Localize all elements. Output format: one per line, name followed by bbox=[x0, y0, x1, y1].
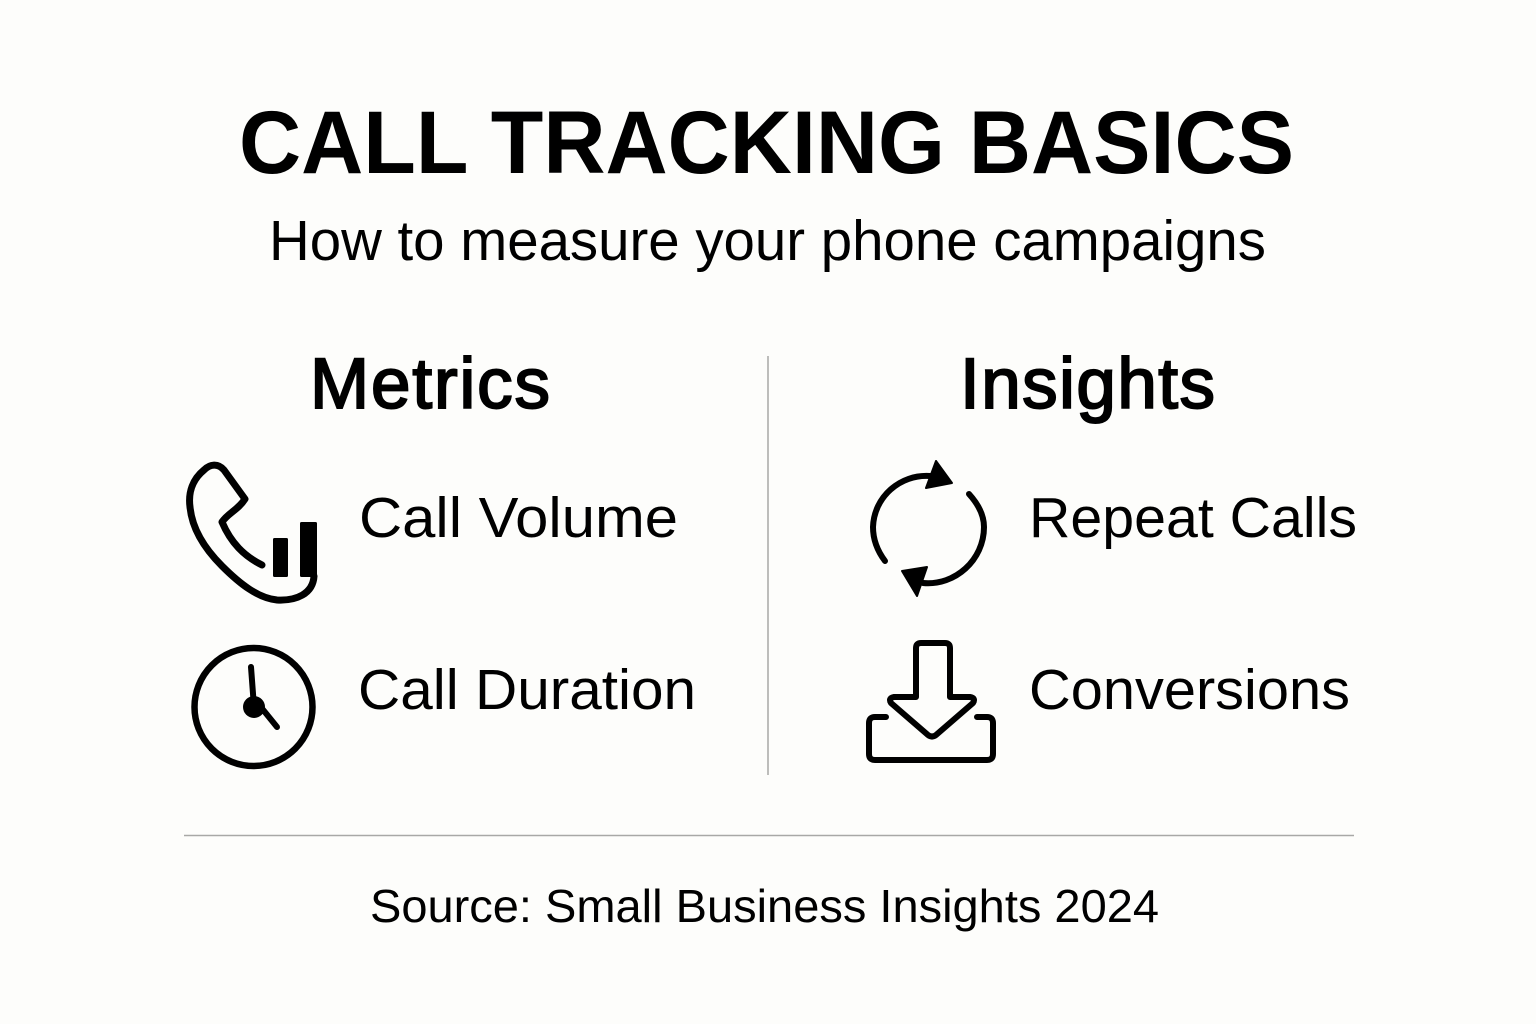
icon: download to tray bbox=[869, 643, 993, 760]
source note: Source: Small Business Insights 2024 bbox=[370, 880, 1159, 932]
icon: repeat arrows bbox=[873, 461, 984, 596]
heading: insights: Insights bbox=[960, 345, 1215, 424]
icon: clock bbox=[194, 648, 312, 766]
label: call duration: Call Duration bbox=[358, 658, 696, 722]
heading: metrics: Metrics bbox=[310, 345, 550, 424]
title: CALL TRACKING BASICS bbox=[239, 92, 1294, 192]
label: call volume: Call Volume bbox=[359, 486, 678, 550]
icon: phone with signal bars bbox=[190, 465, 317, 600]
label: conversions: Conversions bbox=[1029, 658, 1350, 722]
label: repeat calls: Repeat Calls bbox=[1029, 486, 1357, 550]
subtitle: How to measure your phone campaigns bbox=[269, 209, 1266, 273]
panel: insights bbox=[869, 345, 1357, 760]
panel: metrics bbox=[190, 345, 696, 766]
